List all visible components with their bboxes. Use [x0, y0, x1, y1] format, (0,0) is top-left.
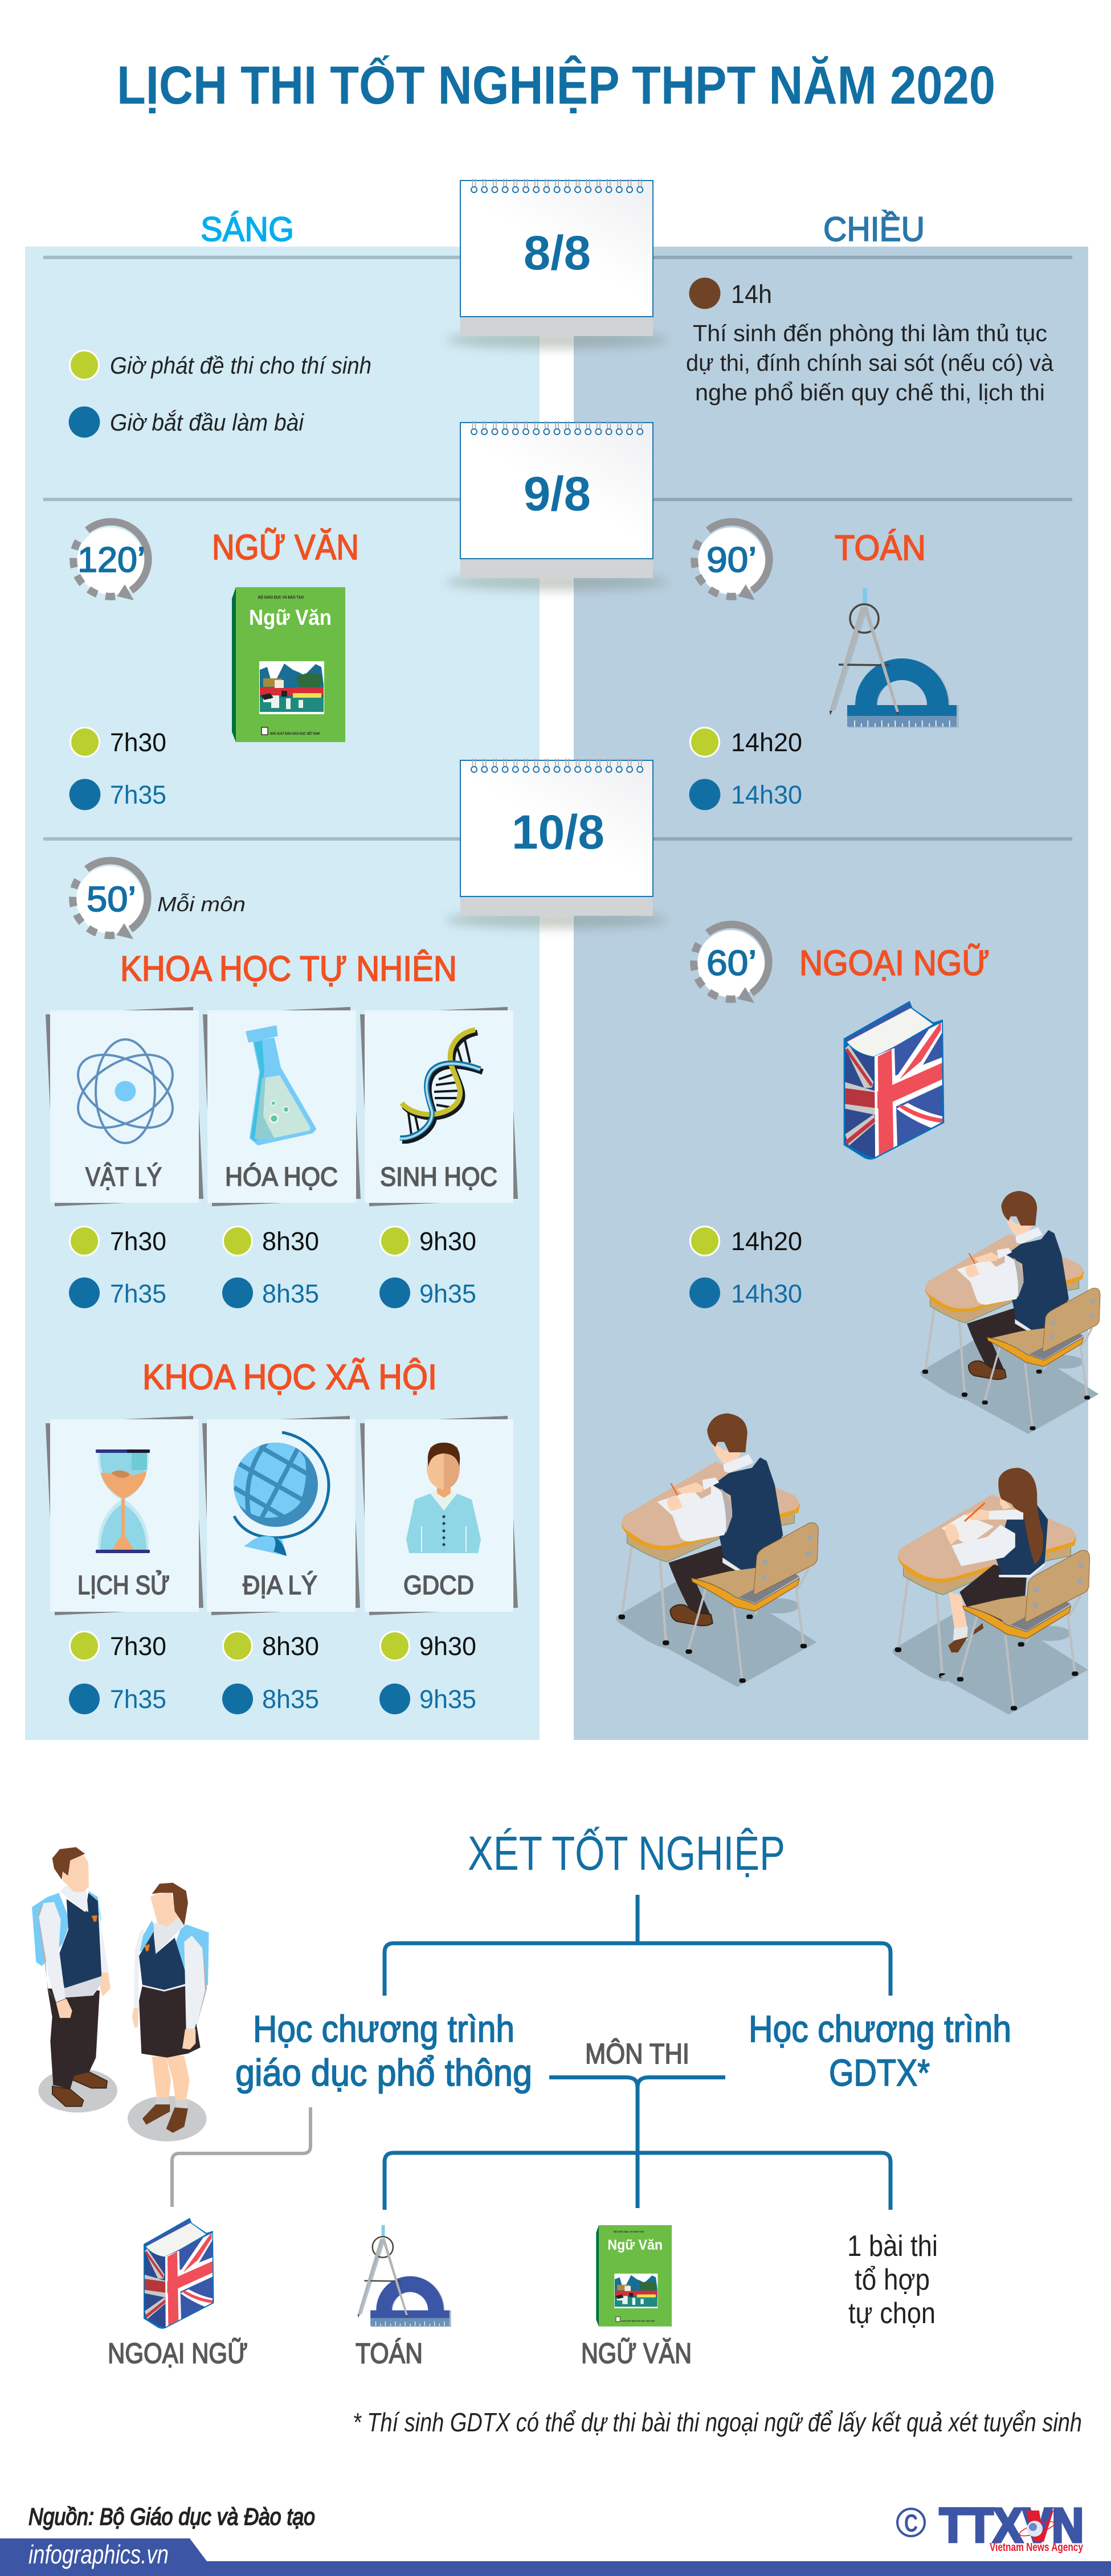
subject: literature: NHÀ XUẤT BẢN GIÁO DỤC VIỆT NAM	[622, 2319, 655, 2322]
card: physics: VẬT LÝ	[85, 1162, 162, 1191]
clock: 120 minutes	[73, 522, 148, 600]
text: general curriculum	[235, 2008, 532, 2094]
footer band	[0, 2538, 1111, 2576]
times: social sciences: 9h30	[419, 1632, 476, 1661]
times: natural sciences: 8h35	[262, 1279, 319, 1308]
panel: morning column	[25, 247, 540, 1740]
calendar: 8/8: 8/8	[524, 226, 591, 280]
illustration: boy at desk, bottom left	[616, 1413, 818, 1687]
card: history	[46, 1416, 203, 1615]
card: civics: GDCD	[403, 1570, 474, 1600]
icon: globe	[228, 1432, 329, 1556]
text block: 14h procedures	[686, 278, 1053, 406]
calendar: 9/8	[446, 421, 668, 591]
subject: elective combination: tổ hợp	[855, 2263, 930, 2296]
tree: subjects branch	[385, 2078, 891, 2210]
times: social sciences: 7h35	[110, 1685, 166, 1714]
subject: foreign language: NGOẠI NGỮ	[108, 2337, 248, 2369]
clock: 50 minutes each subject: 50’	[87, 880, 136, 919]
icon: person	[406, 1443, 481, 1553]
text block: 14h procedures: 14h	[731, 280, 772, 309]
subject: literature: BỘ GIÁO DỤC VÀ ĐÀO TẠO	[614, 2229, 644, 2233]
text: general curriculum: giáo dục phổ thông	[235, 2051, 532, 2094]
panel: afternoon column	[574, 247, 1088, 1740]
times: math	[689, 728, 802, 810]
clock: 50 minutes each subject	[73, 861, 246, 939]
card: history: LỊCH SỬ	[77, 1570, 170, 1600]
times: natural sciences	[69, 1227, 476, 1308]
logo: TTXVN: Vietnam News Agency	[990, 2541, 1084, 2554]
clock: 50 minutes each subject: Mỗi môn	[157, 892, 246, 916]
card: geography	[202, 1416, 360, 1615]
text block: 14h procedures: nghe phổ biến quy chế thi, lịch thi	[695, 379, 1045, 406]
clock: 60 minutes	[694, 924, 769, 1003]
times: natural sciences: 8h30	[262, 1227, 319, 1256]
legend: exam paper handed out: Giờ phát đề thi cho thí sinh	[110, 352, 371, 379]
logo: TTXVN: C	[904, 2509, 918, 2537]
card: geography: ĐỊA LÝ	[243, 1570, 317, 1600]
label: exam subjects: MÔN THI	[585, 2038, 689, 2070]
card: chemistry: HÓA HỌC	[225, 1162, 338, 1191]
card: biology	[360, 1007, 518, 1206]
times: literature	[70, 728, 166, 810]
calendar: 9/8: 9/8	[524, 467, 591, 521]
text: general curriculum: Học chương trình	[253, 2008, 514, 2050]
icon: literature book	[232, 587, 345, 742]
times: natural sciences: 7h35	[110, 1279, 166, 1308]
calendar: 8/8	[446, 179, 668, 349]
subject: literature: NGỮ VĂN	[581, 2337, 692, 2369]
card: physics	[46, 1007, 203, 1206]
clock: 120 minutes: 120’	[77, 540, 145, 580]
times: social sciences: 9h35	[419, 1685, 476, 1714]
logo: TTXVN: TTXVN	[940, 2499, 1084, 2552]
website: infographics.vn	[28, 2540, 169, 2569]
times: foreign language: 14h30	[731, 1279, 802, 1308]
heading: morning: SÁNG	[201, 210, 294, 248]
icon: compass and protractor	[830, 588, 959, 728]
times: social sciences: 7h30	[110, 1632, 166, 1661]
text: continuing education curriculum	[749, 2008, 1011, 2094]
text: continuing education curriculum: GDTX*	[829, 2051, 930, 2094]
icon: atom	[66, 1039, 185, 1143]
title: LỊCH THI TỐT NGHIỆP THPT NĂM 2020	[117, 55, 995, 116]
illustration: girl at desk	[892, 1468, 1090, 1715]
heading: graduation: XÉT TỐT NGHIỆP	[468, 1826, 785, 1880]
heading: natural sciences: KHOA HỌC TỰ NHIÊN	[120, 949, 457, 989]
times: math: 14h20	[731, 728, 802, 757]
times: foreign language: 14h20	[731, 1227, 802, 1256]
times: social sciences: 8h35	[262, 1685, 319, 1714]
icon: literature book: NHÀ XUẤT BẢN GIÁO DỤC VIỆT NAM	[270, 731, 320, 736]
card: biology: SINH HỌC	[380, 1162, 497, 1191]
illustration: two standing students	[32, 1847, 209, 2141]
tree: top branch	[385, 1895, 891, 1996]
icon: union jack book	[844, 1001, 944, 1160]
legend: exam start time: Giờ bắt đầu làm bài	[110, 409, 305, 436]
times: social sciences: 8h30	[262, 1632, 319, 1661]
icon: flask	[247, 1026, 315, 1144]
subject: literature: Ngữ Văn	[607, 2237, 663, 2253]
icon: literature book: BỘ GIÁO DỤC VÀ ĐÀO TẠO	[258, 595, 304, 600]
text block: 14h procedures: dự thi, đính chính sai sót (nếu có) và	[686, 350, 1053, 376]
text block: 14h procedures: Thí sinh đến phòng thi làm thủ tục	[693, 320, 1047, 346]
clock: 60 minutes: 60’	[706, 944, 757, 983]
subject: literature	[581, 2225, 692, 2369]
heading: literature: NGỮ VĂN	[212, 528, 359, 567]
clock: 90 minutes: 90’	[706, 540, 757, 580]
subject: foreign language	[108, 2218, 248, 2369]
times: literature: 7h30	[110, 728, 166, 757]
clock: 90 minutes	[695, 522, 769, 600]
card: civics	[360, 1416, 518, 1615]
heading: afternoon: CHIỀU	[823, 210, 925, 248]
heading: social sciences: KHOA HỌC XÃ HỘI	[142, 1358, 437, 1397]
times: literature: 7h35	[110, 780, 166, 809]
times: social sciences	[69, 1631, 476, 1714]
heading: math: TOÁN	[835, 529, 926, 568]
icon: hourglass	[96, 1449, 150, 1553]
source: Nguồn: Bộ Giáo dục và Đào tạo	[28, 2503, 315, 2530]
icon: DNA helix	[400, 1030, 483, 1141]
times: foreign language	[689, 1227, 802, 1308]
subject: math: TOÁN	[356, 2337, 423, 2369]
illustration: boy at desk, top right	[920, 1191, 1100, 1434]
subject: elective combination: tự chọn	[848, 2297, 936, 2330]
icon: literature book: Ngữ Văn	[249, 606, 332, 630]
times: math: 14h30	[731, 780, 802, 809]
calendar: 10/8	[446, 759, 668, 928]
subject: elective combination: 1 bài thi	[847, 2230, 938, 2263]
legend: exam start time	[69, 407, 305, 437]
subject: math	[356, 2225, 451, 2369]
heading: foreign language: NGOẠI NGỮ	[799, 944, 990, 983]
times: natural sciences: 9h35	[419, 1279, 476, 1308]
text: continuing education curriculum: Học chương trình	[749, 2008, 1011, 2050]
times: natural sciences: 7h30	[110, 1227, 166, 1256]
subject: elective combination	[847, 2230, 938, 2330]
calendar: 10/8: 10/8	[512, 805, 604, 859]
card: chemistry	[203, 1007, 361, 1206]
times: natural sciences: 9h30	[419, 1227, 476, 1256]
connector: foreign language branch	[172, 2107, 311, 2207]
